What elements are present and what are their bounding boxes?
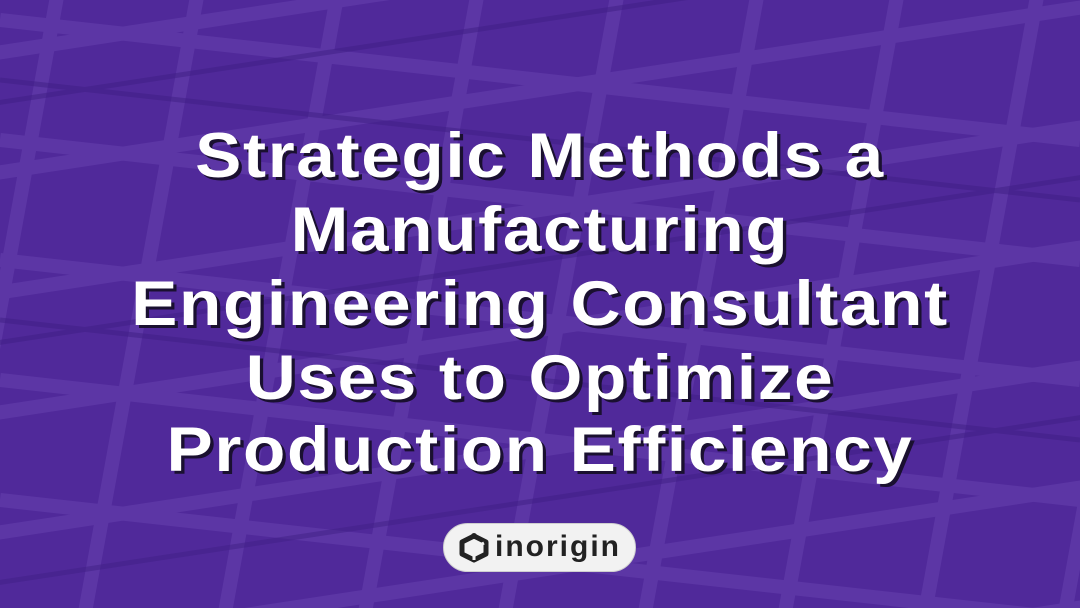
title: Engineering Consultant [131, 269, 949, 339]
title: Production Efficiency [170, 418, 917, 488]
title: Strategic Methods a [198, 124, 888, 194]
title: Uses to Optimize [246, 343, 834, 413]
icon: logo mark [460, 533, 488, 562]
title: Uses to Optimize [249, 346, 838, 416]
title: Strategic Methods a [195, 121, 885, 191]
title: Engineering Consultant [134, 272, 952, 342]
title: Manufacturing [294, 198, 793, 268]
logo pill [443, 523, 636, 572]
title: Production Efficiency [167, 415, 913, 485]
title: Manufacturing [291, 195, 789, 265]
logo text: inorigin [495, 530, 621, 563]
